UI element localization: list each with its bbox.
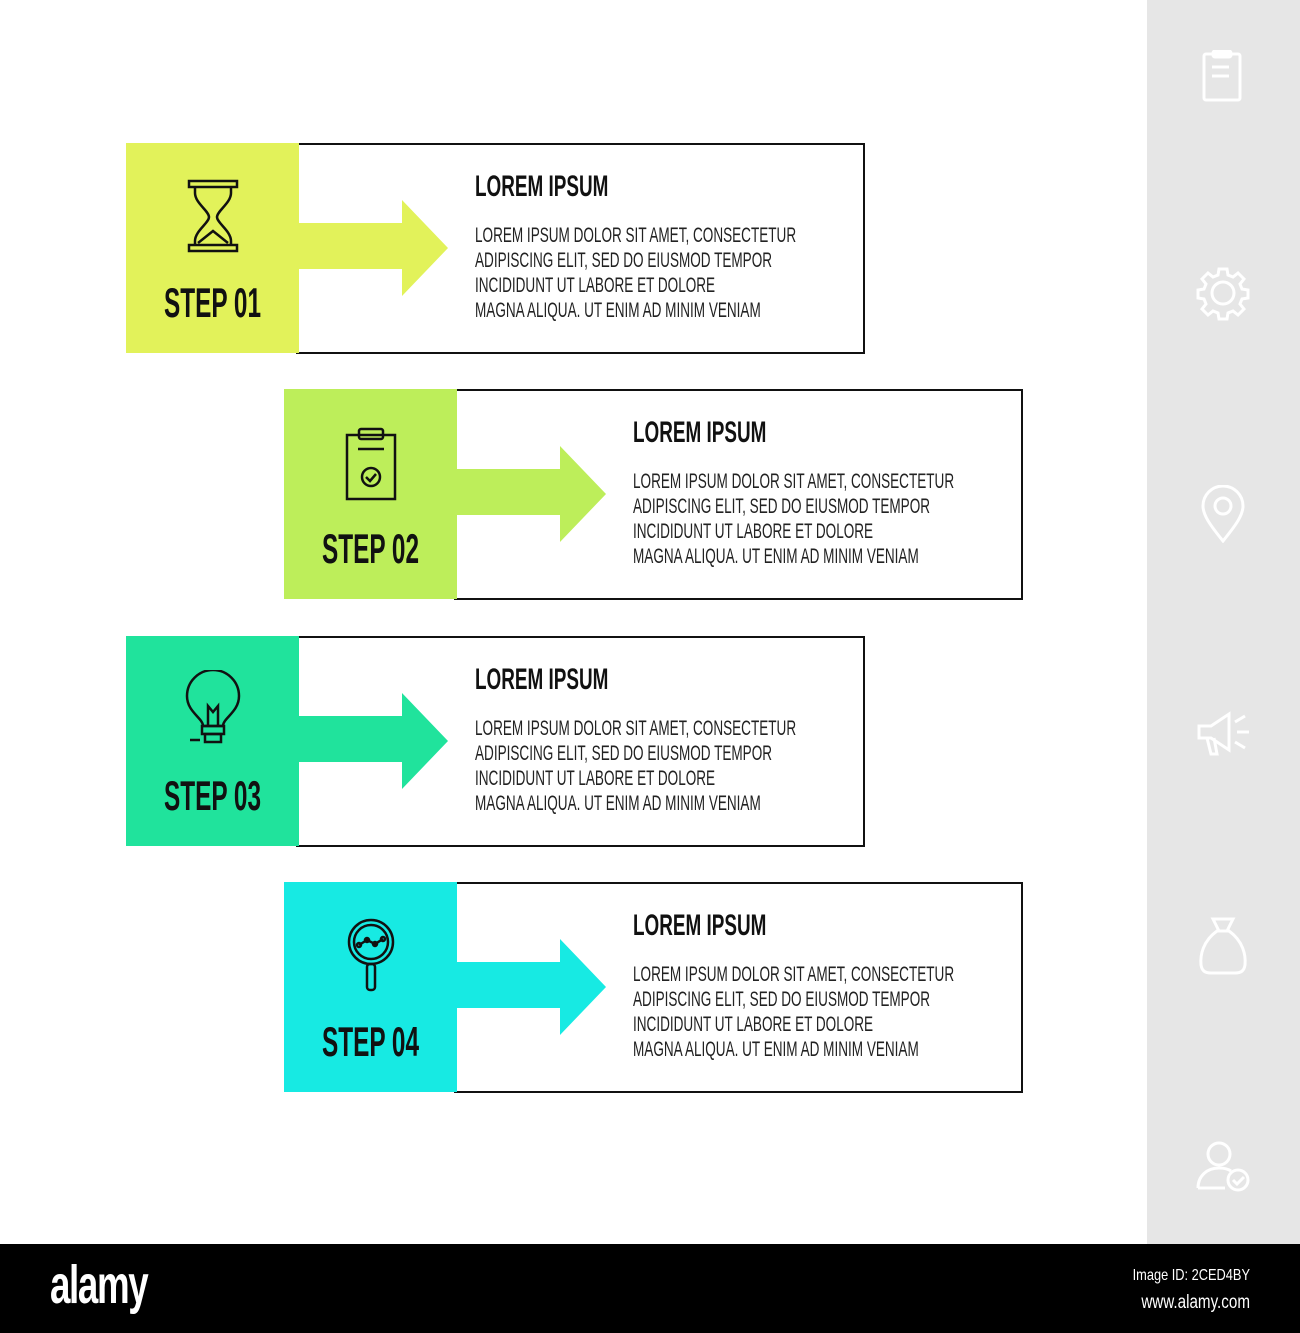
text: ADIPISCING ELIT, SED DO EIUSMOD TEMPOR bbox=[475, 249, 772, 272]
icon: light bulb bbox=[186, 670, 240, 744]
text: MAGNA ALIQUA. UT ENIM AD MINIM VENIAM bbox=[633, 1038, 919, 1061]
heading: LOREM IPSUM bbox=[475, 663, 608, 696]
step 1 bbox=[126, 143, 865, 354]
icon: megaphone bbox=[1198, 712, 1249, 756]
sidebar bbox=[1147, 0, 1300, 1244]
text: LOREM IPSUM DOLOR SIT AMET, CONSECTETUR bbox=[633, 963, 954, 986]
text: LOREM IPSUM DOLOR SIT AMET, CONSECTETUR bbox=[633, 470, 954, 493]
text: ADIPISCING ELIT, SED DO EIUSMOD TEMPOR bbox=[633, 988, 930, 1011]
text bbox=[475, 224, 796, 322]
heading: LOREM IPSUM bbox=[633, 416, 766, 449]
text: INCIDIDUNT UT LABORE ET DOLORE bbox=[475, 767, 715, 790]
text: INCIDIDUNT UT LABORE ET DOLORE bbox=[475, 274, 715, 297]
arrow bbox=[299, 693, 448, 789]
image id: Image ID: 2CED4BY bbox=[1133, 1267, 1250, 1284]
text bbox=[475, 717, 796, 815]
text: MAGNA ALIQUA. UT ENIM AD MINIM VENIAM bbox=[475, 792, 761, 815]
arrow bbox=[457, 446, 606, 542]
icon: user check bbox=[1196, 1142, 1250, 1192]
text: INCIDIDUNT UT LABORE ET DOLORE bbox=[633, 1013, 873, 1036]
icon: gear bbox=[1196, 268, 1250, 320]
text: ADIPISCING ELIT, SED DO EIUSMOD TEMPOR bbox=[475, 742, 772, 765]
icon: clipboard check bbox=[346, 428, 396, 500]
text bbox=[633, 963, 954, 1061]
step label: STEP 02 bbox=[322, 525, 419, 572]
icon: location pin bbox=[1202, 485, 1244, 543]
step label: STEP 03 bbox=[164, 772, 261, 819]
icon: money bag bbox=[1200, 918, 1246, 974]
step label: STEP 01 bbox=[164, 279, 261, 326]
footer bar bbox=[0, 1244, 1300, 1333]
arrow bbox=[299, 200, 448, 296]
text: MAGNA ALIQUA. UT ENIM AD MINIM VENIAM bbox=[633, 545, 919, 568]
icon: clipboard bbox=[1202, 50, 1242, 102]
logo: alamy bbox=[50, 1255, 147, 1315]
text: MAGNA ALIQUA. UT ENIM AD MINIM VENIAM bbox=[475, 299, 761, 322]
url: www.alamy.com bbox=[1141, 1292, 1250, 1313]
step 4 bbox=[284, 882, 1023, 1093]
text: ADIPISCING ELIT, SED DO EIUSMOD TEMPOR bbox=[633, 495, 930, 518]
text: INCIDIDUNT UT LABORE ET DOLORE bbox=[633, 520, 873, 543]
text bbox=[633, 470, 954, 568]
heading: LOREM IPSUM bbox=[633, 909, 766, 942]
step 3 bbox=[126, 636, 865, 847]
step 2 bbox=[284, 389, 1023, 600]
text: LOREM IPSUM DOLOR SIT AMET, CONSECTETUR bbox=[475, 717, 796, 740]
step label: STEP 04 bbox=[322, 1018, 419, 1065]
heading: LOREM IPSUM bbox=[475, 170, 608, 203]
arrow bbox=[457, 939, 606, 1035]
icon: hourglass bbox=[188, 180, 238, 252]
text: LOREM IPSUM DOLOR SIT AMET, CONSECTETUR bbox=[475, 224, 796, 247]
icon: magnifier chart bbox=[348, 918, 394, 992]
